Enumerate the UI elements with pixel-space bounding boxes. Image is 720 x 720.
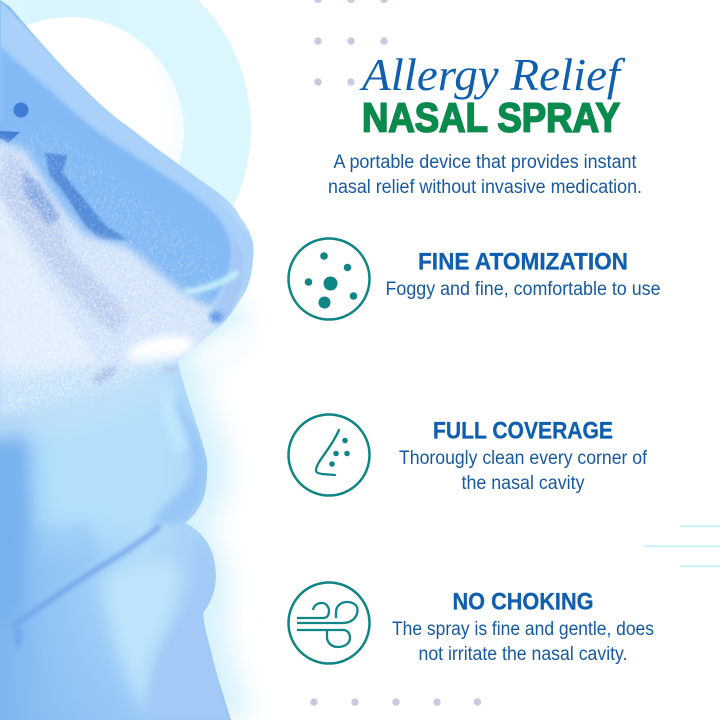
text: full coverage — [399, 448, 648, 494]
title: NASAL SPRAY — [362, 96, 620, 141]
icon: nose — [288, 414, 370, 496]
text: fine atomization: Foggy and fine, comfortable to use — [386, 279, 660, 300]
icon: fine particles — [288, 238, 370, 320]
dots: top — [314, 0, 388, 86]
title: Allergy Relief — [359, 49, 626, 100]
white mist — [0, 135, 223, 415]
heading: fine atomization: FINE ATOMIZATION — [418, 248, 628, 276]
left dark band — [6, 439, 30, 610]
mist bright core — [0, 206, 95, 378]
icon: airflow — [288, 582, 370, 664]
text: full coverage: the nasal cavity — [462, 473, 585, 494]
decorative lines right — [644, 525, 720, 568]
rim lower glow — [216, 241, 242, 319]
lower mist fade — [0, 358, 180, 440]
text: full coverage: Thorougly clean every corner of — [399, 448, 648, 469]
title — [359, 49, 626, 141]
mist shadow band — [0, 148, 130, 335]
darker band near arrow — [23, 170, 60, 225]
illustration: face profile with spray — [0, 0, 254, 720]
philtrum light band — [162, 394, 185, 452]
face base — [0, 0, 260, 720]
soft glow around face — [160, 300, 250, 720]
sparse cavity speckle — [12, 126, 228, 304]
bright puff — [124, 332, 196, 366]
white fade at nostril edge — [185, 323, 259, 377]
partial arrow head — [0, 131, 20, 143]
decorative circle behind nose — [0, 0, 251, 309]
mid face lighter panel — [25, 423, 116, 548]
left mouth shade — [40, 520, 96, 570]
nasal cavity — [0, 47, 232, 308]
dots: bottom — [310, 698, 481, 706]
upper lip shading — [152, 406, 207, 526]
text: no choking: The spray is fine and gentle, does — [392, 619, 654, 640]
intro text: nasal relief without invasive medication. — [328, 177, 642, 198]
intro text: A portable device that provides instant — [334, 152, 637, 173]
blue spot by nostril — [209, 311, 223, 323]
mouth line — [12, 526, 160, 627]
purple smudges — [92, 365, 117, 385]
mouth corner — [14, 626, 22, 648]
arrow dot — [14, 102, 28, 118]
chin light panel — [103, 560, 179, 720]
heading: no choking: NO CHOKING — [452, 588, 594, 616]
spray arrow — [45, 153, 128, 240]
spray speckle — [0, 130, 224, 422]
intro text — [328, 152, 642, 198]
heading: full coverage: FULL COVERAGE — [433, 418, 613, 444]
lower face darkening — [42, 592, 231, 720]
nose rim highlight — [0, 0, 258, 300]
text: no choking — [392, 619, 654, 665]
jaw shade — [156, 651, 228, 720]
nostril glow — [185, 272, 238, 292]
text: no choking: not irritate the nasal cavity. — [418, 644, 628, 665]
